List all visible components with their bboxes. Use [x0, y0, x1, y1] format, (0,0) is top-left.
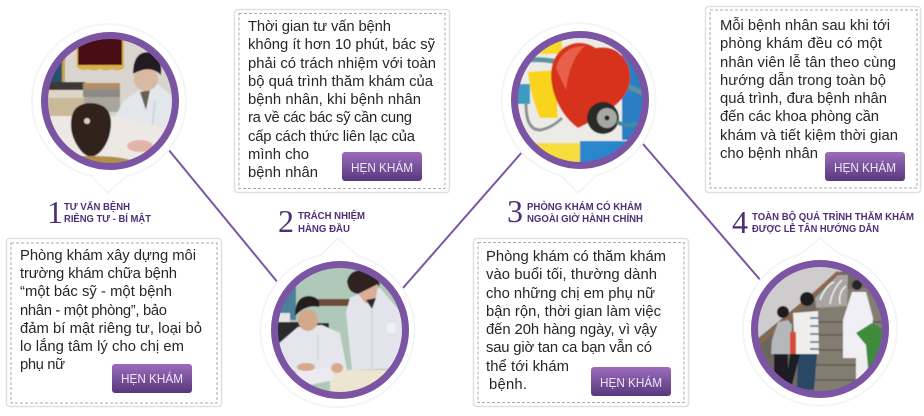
panel: step 2 description: không ít hơn 10 phút, bác sỹ — [248, 37, 436, 53]
panel: step 2 description: mình cho — [248, 147, 309, 163]
panel: step 2 description: bệnh nhân, khi bệnh nhân — [248, 92, 421, 108]
step 1 heading: RIÊNG TƯ - BÍ MẬT — [64, 212, 152, 225]
panel: step 1 description — [6, 238, 222, 406]
panel: step 2 description: HẸN KHÁM — [351, 160, 413, 175]
step 4 heading: 4 — [732, 204, 748, 240]
panel: step 4 description: nhân viên lễ tân theo cùng — [720, 54, 896, 71]
panel: step 3 description: bệnh. — [489, 377, 527, 393]
panel: step 3 description: sau giờ tan ca bạn vẫn có — [486, 339, 652, 356]
panel: step 2 description: ra về các bác sỹ cần cung — [248, 110, 412, 126]
panel: step 1 description: HẸN KHÁM — [121, 371, 183, 386]
step 3 heading: 3 — [507, 193, 523, 229]
panel: step 4 description: đến các khoa phòng cần — [720, 109, 879, 125]
panel: step 4 description — [706, 6, 920, 192]
step 3 heading: PHÒNG KHÁM CÓ KHÁM — [527, 200, 642, 213]
step 3 photo circle — [502, 23, 656, 193]
panel: step 2 description: Thời gian tư vấn bệnh — [248, 19, 391, 35]
panel: step 4 description: HẸN KHÁM — [834, 160, 896, 175]
panel: step 1 description: trường khám chữa bệnh — [20, 266, 177, 282]
panel: step 4 description: Mỗi bệnh nhân sau khi tới — [720, 17, 890, 34]
panel: step 1 description: nhân - một phòng”, bảo — [20, 303, 167, 319]
step 4 heading: TOÀN BỘ QUÁ TRÌNH THĂM KHÁM — [752, 210, 914, 223]
panel: step 1 description: Phòng khám xây dựng môi — [20, 248, 196, 264]
panel: step 1 description: “một bác sỹ - một bệnh — [20, 284, 172, 300]
step 3 heading: NGOÀI GIỜ HÀNH CHÍNH — [527, 212, 643, 225]
panel: step 2 description: bệnh nhân — [248, 165, 318, 181]
step 3 heading — [507, 193, 643, 229]
panel: step 1 description: lo lắng tâm lý cho chị em — [20, 338, 184, 355]
panel: step 3 description: Phòng khám có thăm khám — [486, 249, 666, 265]
panel: step 4 description: quá trình, đưa bệnh nhân — [720, 91, 887, 107]
step 2 heading — [278, 203, 365, 239]
panel: step 3 description: đến 20h hàng ngày, vì vậy — [486, 322, 658, 338]
panel: step 4 description: khám và tiết kiệm thời gian — [720, 128, 898, 144]
step 2 heading: HÀNG ĐẦU — [298, 222, 350, 235]
step 2 photo circle — [260, 238, 414, 407]
panel: step 4 description: hướng dẫn trong toàn bộ — [720, 72, 886, 89]
panel: step 3 description: cho những chị em phụ nữ — [486, 286, 655, 302]
panel: step 4 description: cho bệnh nhân — [720, 146, 818, 162]
panel: step 3 description: HẸN KHÁM — [600, 375, 662, 390]
step 4 heading: ĐƯỢC LỄ TÂN HƯỚNG DẪN — [752, 222, 879, 235]
panel: step 2 description — [234, 10, 450, 192]
step 4 heading — [732, 204, 914, 240]
step 1 photo circle — [32, 24, 186, 193]
panel: step 1 description: phụ nữ — [20, 357, 65, 373]
step 2 heading: TRÁCH NHIỆM — [298, 209, 365, 222]
step 4 photo circle — [743, 238, 897, 406]
step 2 heading: 2 — [278, 203, 294, 239]
connector lines between circles — [168, 144, 762, 288]
panel: step 2 description: phải có trách nhiệm với toàn — [248, 56, 436, 72]
step 1 heading — [47, 194, 152, 230]
panel: step 4 description: phòng khám đều có một — [720, 36, 882, 52]
step 1 heading: TƯ VẤN BỆNH — [64, 200, 130, 213]
panel: step 3 description — [474, 238, 688, 406]
panel: step 3 description: thể tới khám — [486, 359, 569, 375]
panel: step 2 description: cấp cách thức liên lạc của — [248, 129, 416, 145]
step 1 heading: 1 — [47, 194, 63, 230]
panel: step 3 description: bận rộn, thời gian làm việc — [486, 304, 662, 320]
panel: step 2 description: bộ quá trình thăm khám của — [248, 74, 434, 90]
panel: step 1 description: đảm bí mật riêng tư, loại bỏ — [20, 321, 202, 337]
panel: step 3 description: vào buổi tối, thường dành — [486, 267, 657, 283]
